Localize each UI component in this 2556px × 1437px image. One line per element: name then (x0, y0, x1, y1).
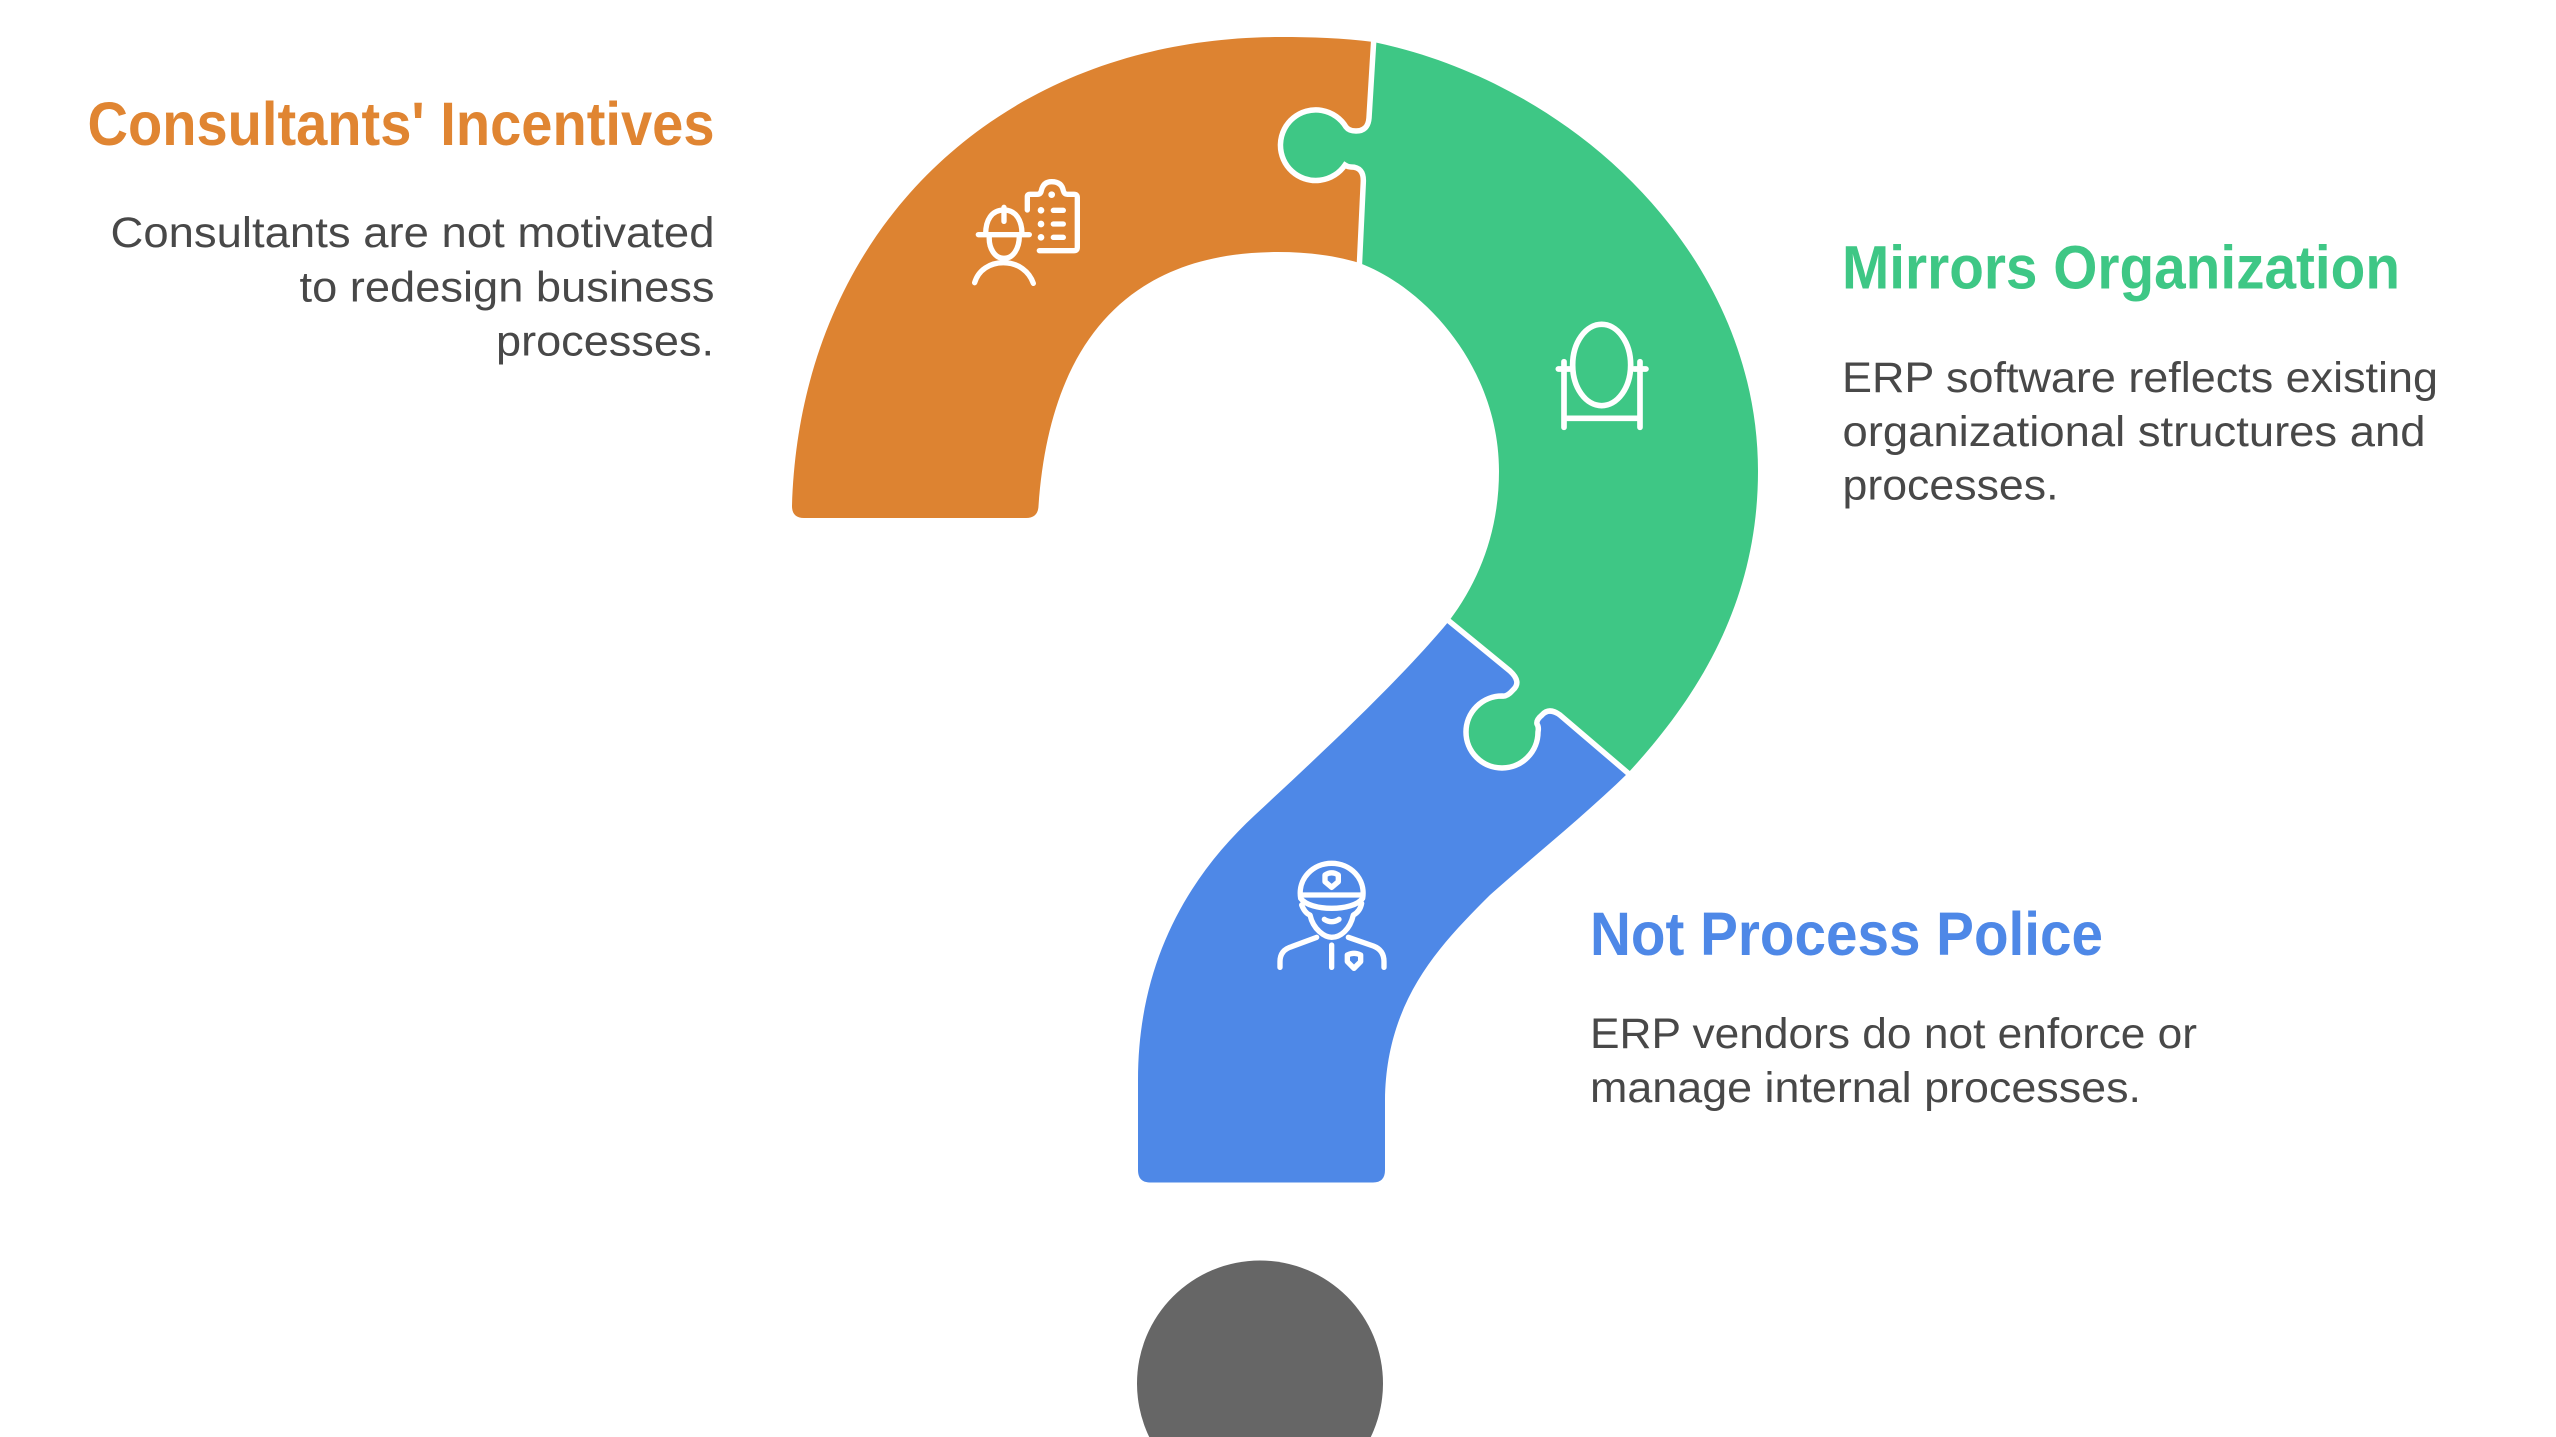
segment: green right curve (1280, 42, 1758, 773)
segment: orange top-left (792, 37, 1374, 518)
description: consultants: processes. (496, 318, 714, 366)
description: police: manage internal processes. (1590, 1064, 2141, 1112)
puzzle seam: orange and green (1280, 36, 1374, 269)
description: consultants (110, 209, 714, 366)
text block: Mirrors Organization (1842, 234, 2438, 510)
description: consultants: Consultants are not motivated (110, 209, 714, 257)
description: consultants: to redesign business (300, 264, 714, 312)
icon: police officer (1280, 863, 1384, 968)
heading: Consultants' Incentives: Consultants' Incentives (88, 90, 714, 158)
description: police (1590, 1010, 2197, 1112)
description: police: ERP vendors do not enforce or (1590, 1010, 2197, 1058)
description: mirrors: processes. (1842, 462, 2058, 510)
puzzle seam: green and blue (1445, 618, 1632, 776)
text block: Not Process Police (1590, 900, 2197, 1112)
heading: Mirrors Organization: Mirrors Organization (1842, 234, 2400, 302)
icon: standing mirror (1558, 324, 1646, 427)
icon: engineer with clipboard (975, 182, 1077, 283)
description: mirrors (1842, 354, 2438, 510)
text block: Consultants' Incentives (88, 90, 714, 366)
heading: Not Process Police: Not Process Police (1590, 900, 2103, 968)
segment: blue lower stem (1138, 621, 1628, 1182)
question mark graphic (792, 36, 1758, 1437)
question mark dot (1137, 1260, 1383, 1437)
description: mirrors: organizational structures and (1842, 408, 2426, 456)
description: mirrors: ERP software reflects existing (1842, 354, 2438, 402)
